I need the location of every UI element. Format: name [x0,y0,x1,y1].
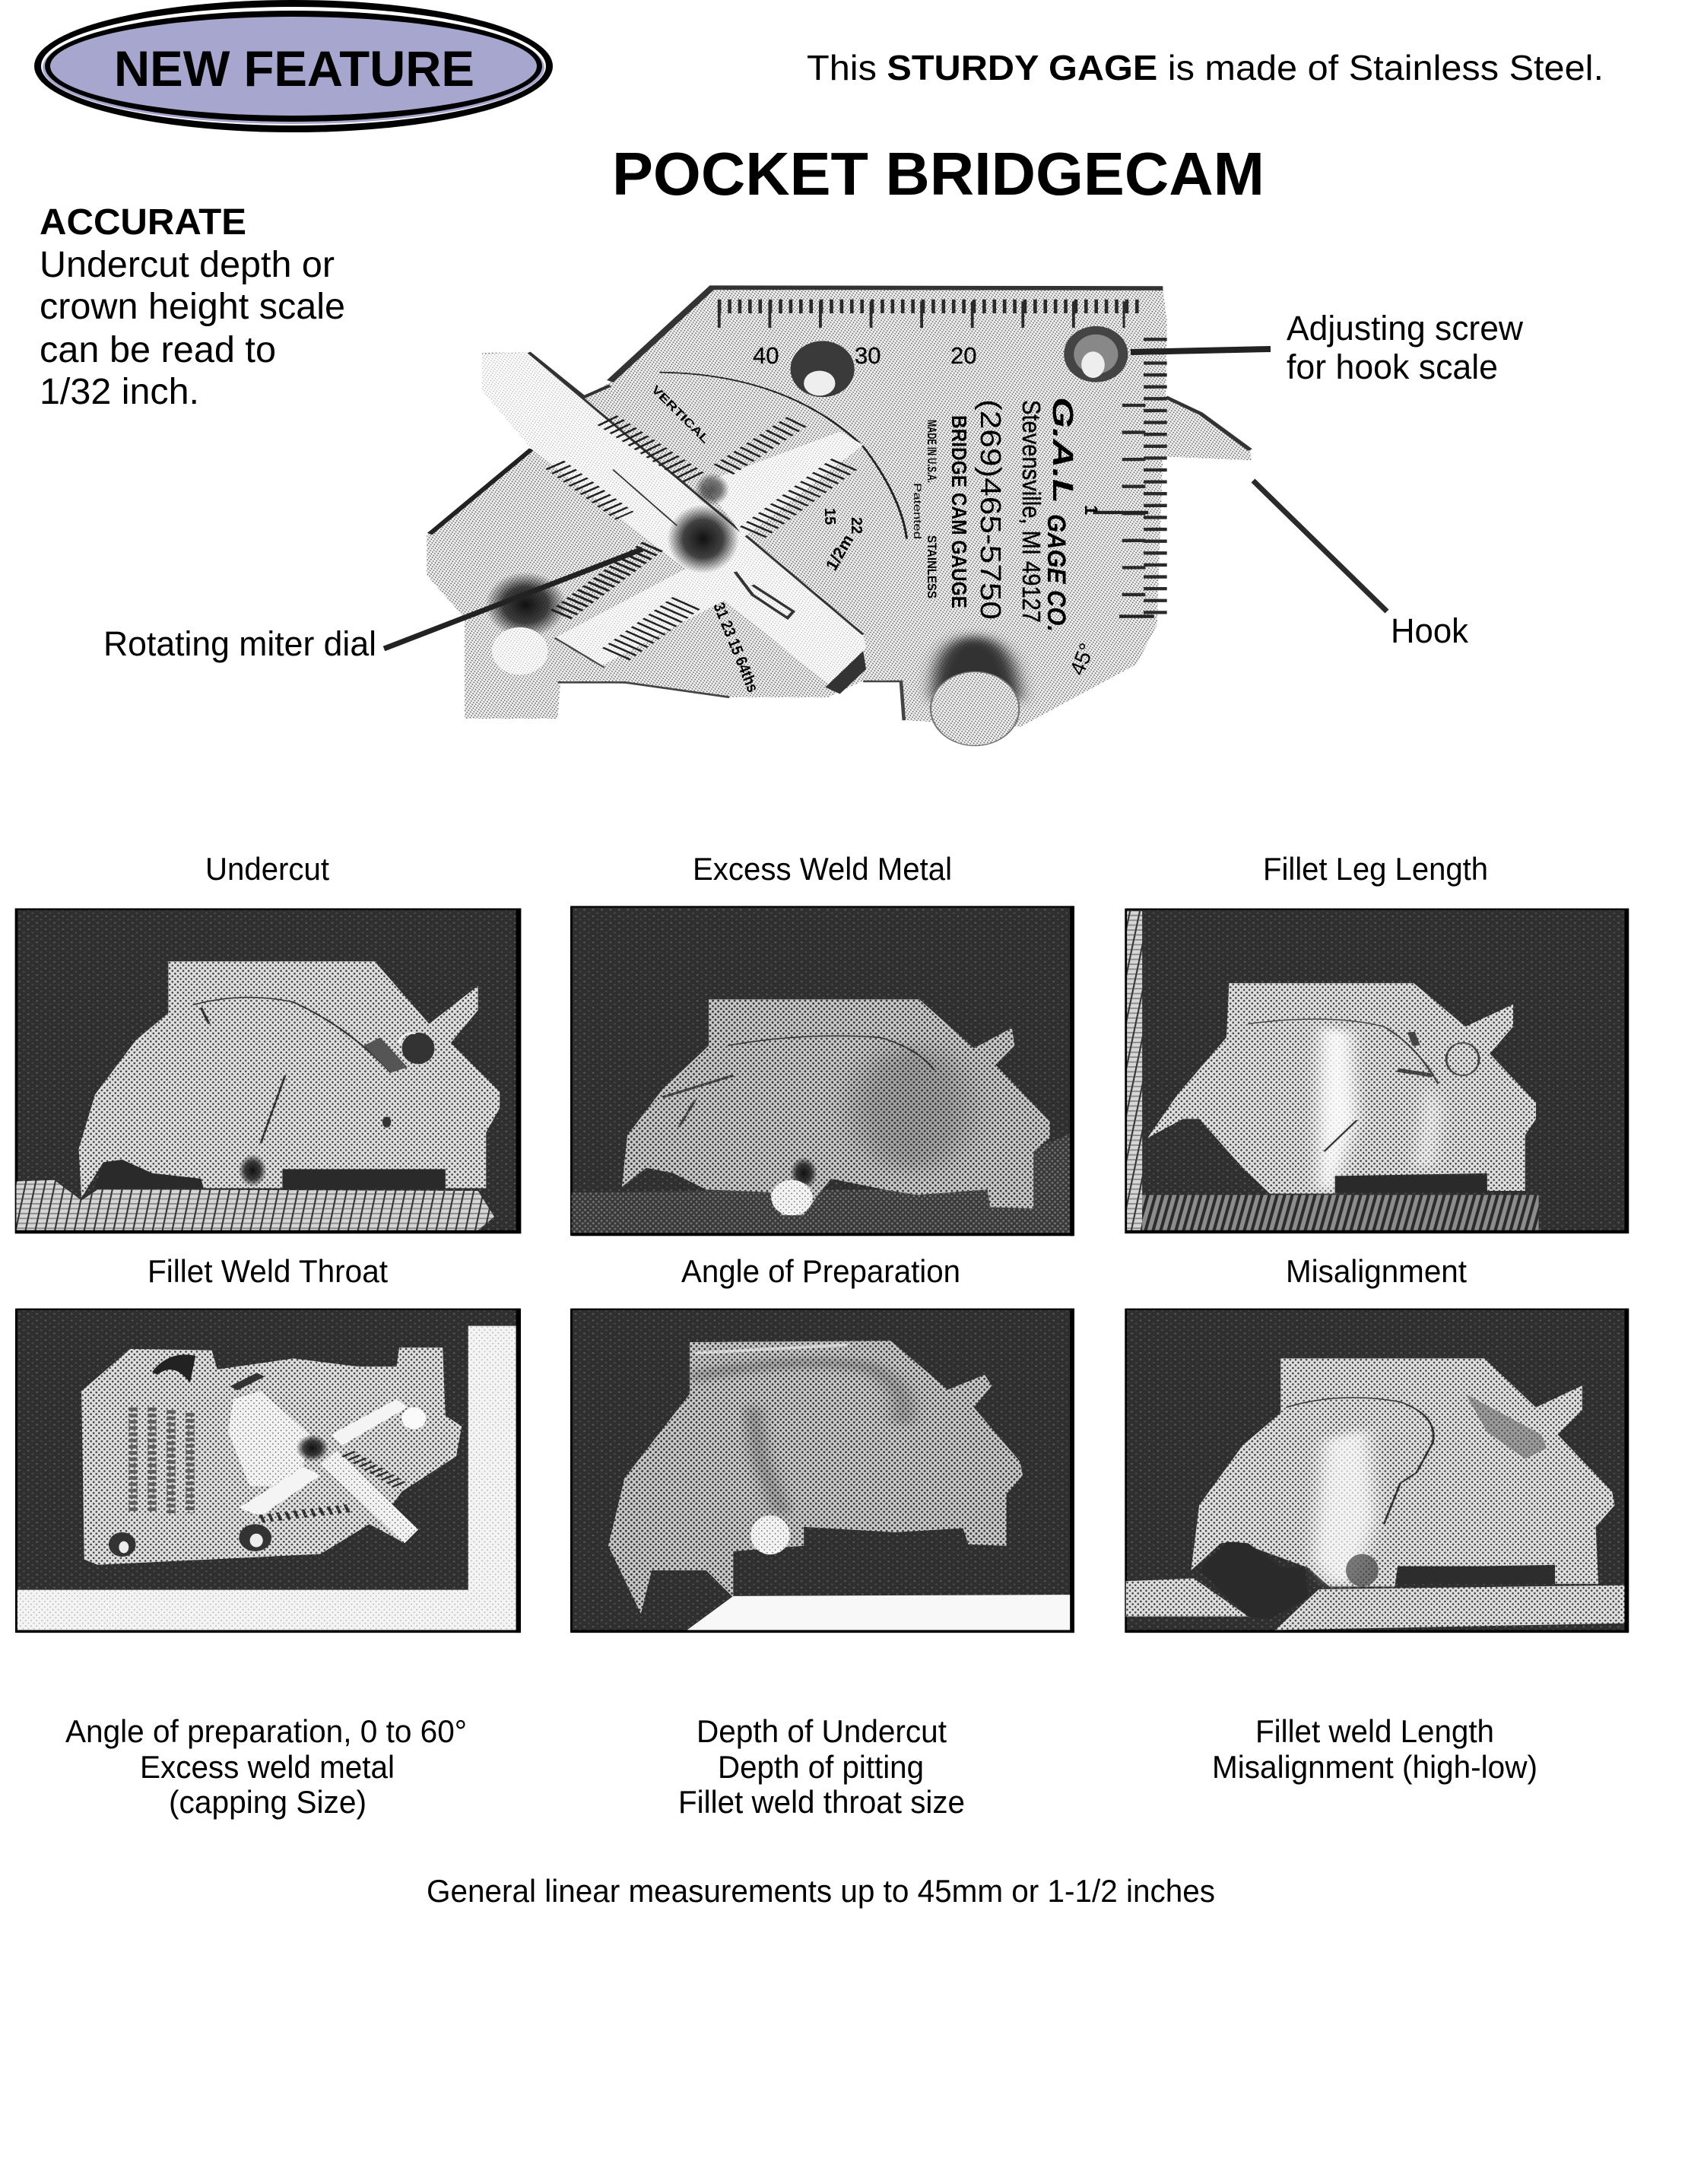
gauge illustration [427,287,1252,746]
heading: Undercut [205,851,329,887]
photo [1126,1309,1629,1633]
text block: column 3 features [1212,1713,1537,1785]
gauge printed text: GAGE CO. [1042,514,1071,632]
edges [610,287,1163,381]
screws [791,341,855,397]
text block: accurate: 1/32 inch. [40,372,199,412]
gauge printed text: Stevensville, MI 49127 [1017,400,1046,623]
text block: column 3 features: Misalignment (high-low) [1212,1749,1537,1785]
heading: Excess Weld Metal [693,851,952,887]
text block: accurate: crown height scale [40,287,345,327]
label: adjusting screw [1287,309,1523,386]
gauge printed text: STAINLESS [925,535,939,598]
gauge printed text: VERTICAL [649,383,712,446]
gauge printed text [649,383,1078,695]
ruler ticks [718,290,1140,322]
text block: column 1 features [65,1713,467,1820]
label: adjusting screw: Adjusting screw [1287,309,1523,348]
heading: Misalignment [1286,1253,1467,1289]
photo [16,1309,520,1633]
label: rotating miter dial: Rotating miter dial [103,624,376,663]
panel: undercut [16,851,520,1233]
panel: excess weld metal [571,851,1074,1236]
text block: accurate: can be read to [40,330,276,370]
knob [933,636,1020,700]
photo [1126,909,1629,1233]
label: adjusting screw: for hook scale [1287,348,1498,386]
dial arc [659,373,907,539]
text block: column 2 features [678,1713,965,1820]
text block: column 2 features: Fillet weld throat size [678,1784,965,1820]
gauge printed text: 22 [848,517,865,534]
gauge printed text: MADE IN U.S.A. [925,420,939,483]
scale numbers: 20 [950,342,976,369]
text block: general measurements: General linear measurements up to 45mm or 1-1/2 inches [427,1873,1215,1909]
gauge body [427,287,1252,727]
gauge printed text: G.A.L [1046,397,1078,503]
text block: column 1 features: Excess weld metal [140,1749,395,1785]
panel: fillet weld throat [16,1253,520,1633]
gauge printed text: 1/2m [822,532,857,573]
text block: column 1 features: Angle of preparation, 0 to 60° [65,1713,467,1749]
scale numbers: 40 [753,342,779,369]
arrow: hook [1253,481,1387,611]
heading: Fillet Leg Length [1263,851,1488,887]
dial scales [607,421,697,480]
badge: new feature oval [34,0,553,132]
title: POCKET BRIDGECAM [612,140,1265,208]
scale numbers: 45° [1065,640,1099,678]
scale numbers: 1 [1080,505,1101,515]
scale numbers [753,342,1101,678]
badge: new feature oval: NEW FEATURE [114,40,474,97]
heading: Angle of Preparation [681,1253,960,1289]
panel: fillet leg length [1126,851,1629,1233]
tagline: This STURDY GAGE is made of Stainless Steel. [807,48,1604,87]
text block: accurate [40,202,345,412]
gauge printed text: BRIDGE CAM GAUGE [947,415,971,608]
gauge printed text: Patented [912,483,924,539]
scale numbers: 30 [855,342,881,369]
long bar [482,353,866,684]
heading: Fillet Weld Throat [148,1253,388,1289]
text block: column 2 features: Depth of pitting [718,1749,924,1785]
text block: column 2 features: Depth of Undercut [697,1713,947,1749]
panel: misalignment [1126,1253,1629,1633]
gauge printed text: 15 [821,508,838,525]
panel: angle of preparation [571,1253,1074,1633]
text block: accurate: ACCURATE [40,202,246,243]
text block: column 1 features: (capping Size) [169,1784,367,1820]
gauge printed text: (269)465-5750 [974,399,1006,620]
label: hook: Hook [1391,611,1468,650]
gauge printed text: 31 23 15 64ths [709,600,762,695]
photo [571,1309,1074,1633]
text block: column 3 features: Fillet weld Length [1255,1713,1494,1749]
text block: accurate: Undercut depth or [40,245,335,285]
arrow: rotating miter dial [384,549,643,649]
crossing arm [703,432,863,537]
smudges [667,504,739,573]
photo [571,906,1074,1236]
photo [16,909,520,1233]
arrow: adjusting screw [1131,349,1271,352]
